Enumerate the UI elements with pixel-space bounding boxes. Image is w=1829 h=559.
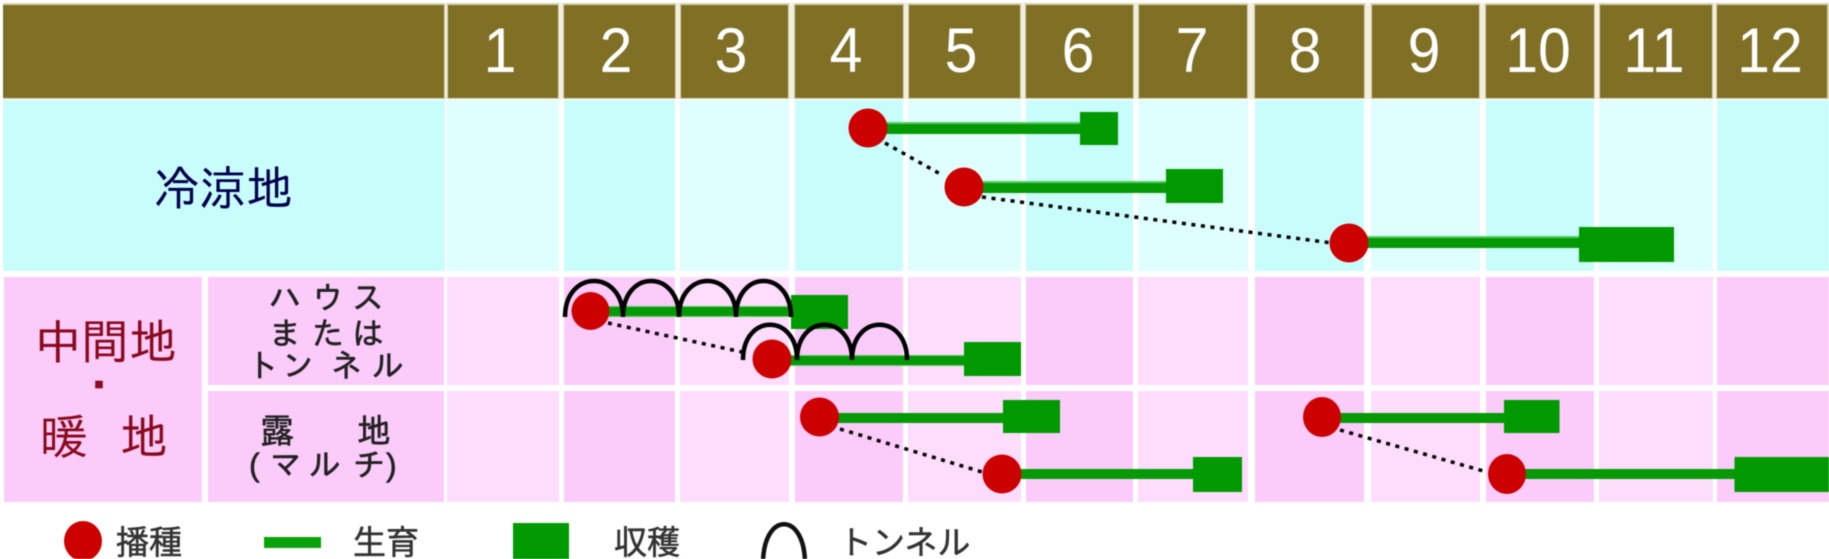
panel: cool region row [3, 100, 1829, 271]
header row: months: 12 [1737, 15, 1803, 85]
label: open field with mulch: 露地 [260, 413, 391, 451]
icon: tunnel arcs, second sowing [743, 325, 907, 360]
icon: tunnel arcs, first sowing [565, 281, 791, 317]
header row: months: 11 [1623, 15, 1685, 85]
icon: harvest [513, 523, 569, 559]
header row: months [3, 5, 1827, 98]
header row: months: 4 [830, 15, 862, 85]
icon: growth [264, 537, 321, 548]
schedule: open field [800, 397, 1829, 494]
panel: intermediate and warm region rows [4, 277, 1829, 502]
header row: months: 1 [484, 15, 516, 85]
label: house or tunnel: または [269, 316, 384, 352]
label: intermediate and warm regions: 中間地 [34, 317, 177, 370]
header row: months: 3 [715, 15, 747, 85]
header row: months: 6 [1062, 15, 1094, 85]
icon: tunnel [763, 524, 805, 559]
label: open field with mulch [249, 413, 397, 483]
schedule: house or tunnel [565, 281, 1021, 378]
label: intermediate and warm regions [34, 317, 177, 465]
schedule: cool region [848, 108, 1674, 262]
label: cool region: 冷涼地 [153, 162, 293, 215]
label: open field with mulch: (マルチ) [249, 447, 397, 483]
label: house or tunnel: ハウス [269, 280, 384, 316]
label: intermediate and warm regions: ・ [76, 360, 122, 412]
header row: months: 7 [1176, 15, 1208, 85]
header row: months: 8 [1289, 15, 1321, 85]
legend [64, 521, 970, 559]
header row: months: 2 [600, 15, 632, 85]
header row: months: 5 [945, 15, 977, 85]
label: house or tunnel [247, 280, 404, 384]
icon: sowing [64, 521, 102, 559]
label: intermediate and warm regions: 暖地 [40, 412, 168, 465]
header row: months: 10 [1505, 15, 1571, 85]
label: house or tunnel: トンネル [247, 348, 404, 384]
header row: months: 9 [1408, 15, 1440, 85]
